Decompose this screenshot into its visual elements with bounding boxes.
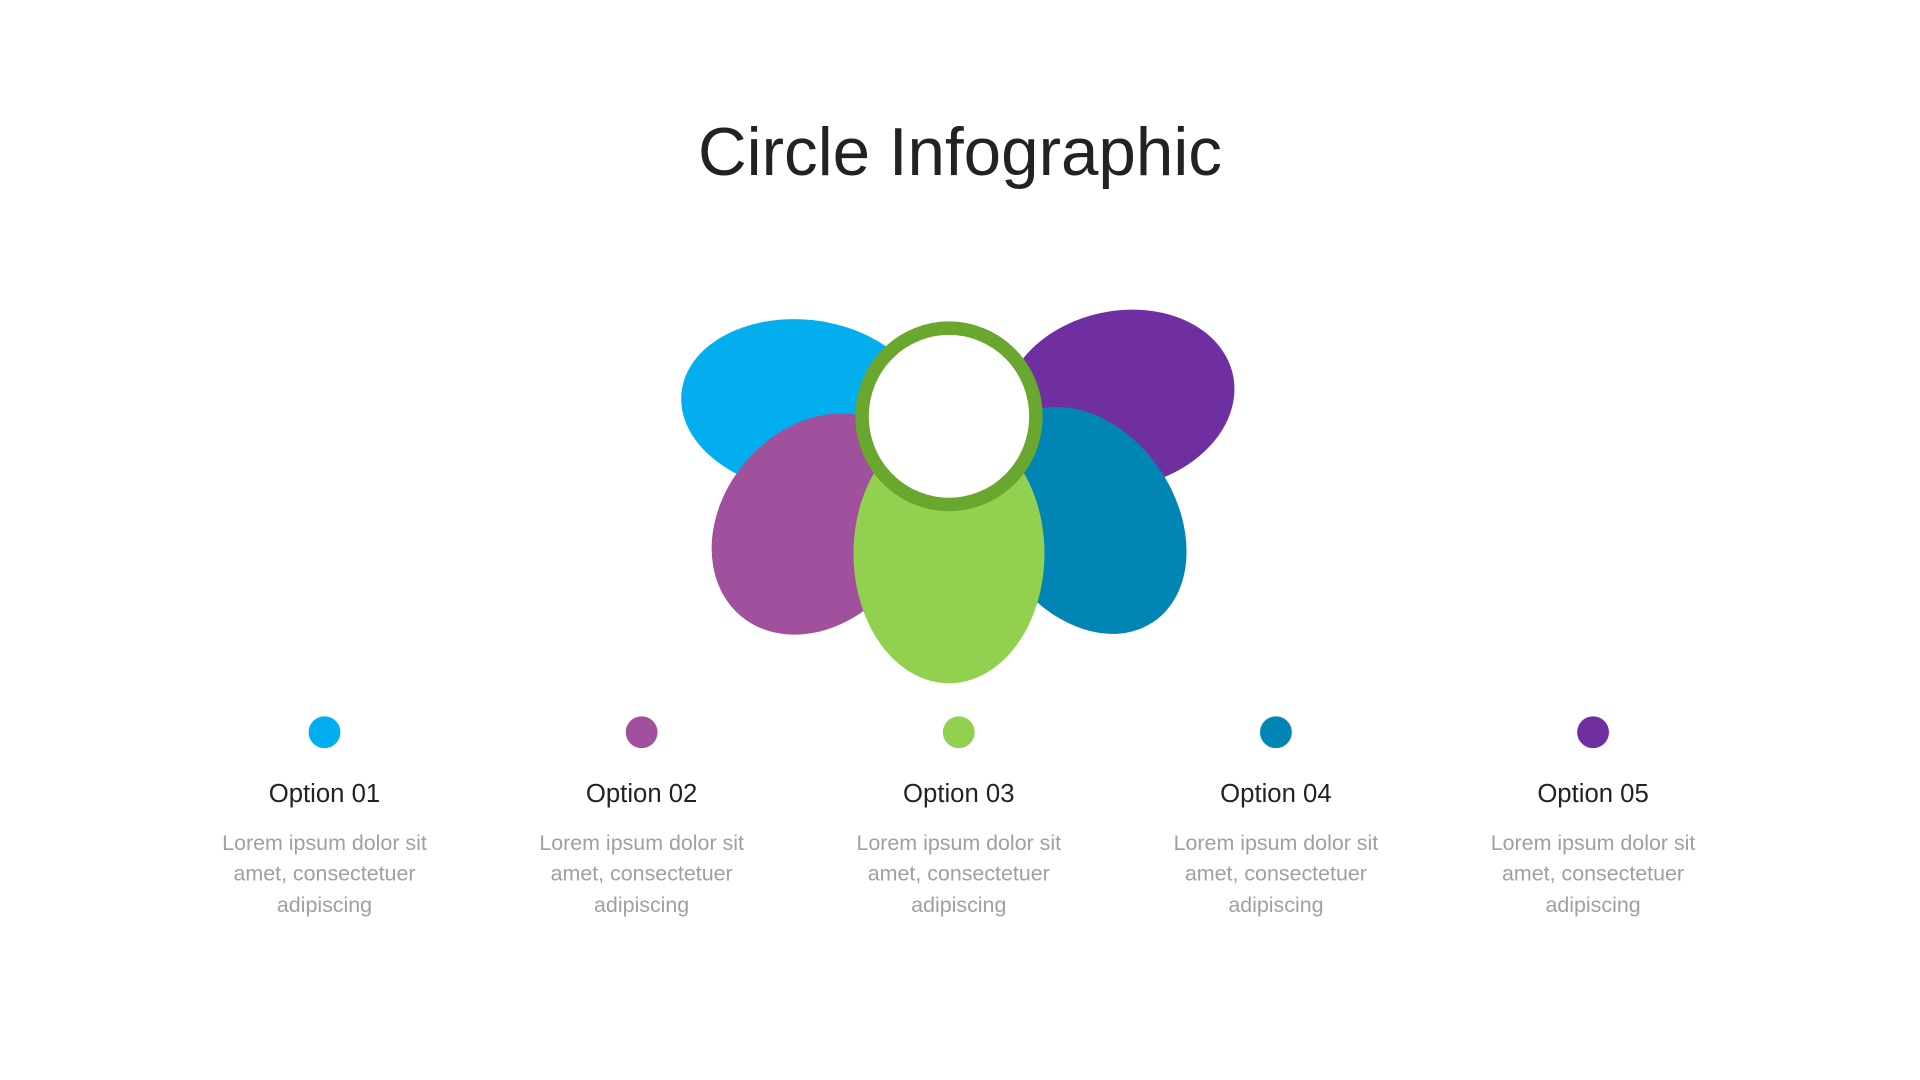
option 03: Option 03 <box>903 780 1015 808</box>
option 05: Lorem ipsum dolor sit <box>1491 831 1695 855</box>
option 04: Option 04 <box>1220 780 1332 808</box>
option 01 <box>222 716 427 917</box>
option 01: Option 01 <box>269 780 380 808</box>
option 02 <box>539 716 744 917</box>
petal: cyan <box>673 307 934 503</box>
option 02: Option 02 <box>586 780 697 808</box>
option 02: amet, consectetuer <box>551 861 733 885</box>
option 03: adipiscing <box>911 893 1006 917</box>
option 03: amet, consectetuer <box>868 861 1050 885</box>
option 03 <box>856 716 1061 917</box>
option 01: adipiscing <box>277 893 372 917</box>
center ring <box>862 328 1036 504</box>
option 02: adipiscing <box>594 893 689 917</box>
option 01: Lorem ipsum dolor sit <box>222 831 427 855</box>
option 04: Lorem ipsum dolor sit <box>1174 831 1378 855</box>
petal: teal <box>941 368 1228 673</box>
title: Circle Infographic <box>698 115 1222 190</box>
option 02: Lorem ipsum dolor sit <box>539 831 744 855</box>
option 05 <box>1491 716 1695 917</box>
petal: green <box>853 424 1044 683</box>
option 04 <box>1174 716 1378 917</box>
petal: purple <box>987 289 1251 510</box>
option 05: amet, consectetuer <box>1502 861 1684 885</box>
option 01: amet, consectetuer <box>233 861 416 885</box>
flower diagram <box>668 289 1251 683</box>
option 05: Option 05 <box>1537 780 1649 808</box>
option 05: adipiscing <box>1545 893 1641 917</box>
option 03: Lorem ipsum dolor sit <box>856 831 1061 855</box>
option 04: adipiscing <box>1228 893 1324 917</box>
petal: magenta <box>668 371 968 677</box>
option 04: amet, consectetuer <box>1185 861 1367 885</box>
